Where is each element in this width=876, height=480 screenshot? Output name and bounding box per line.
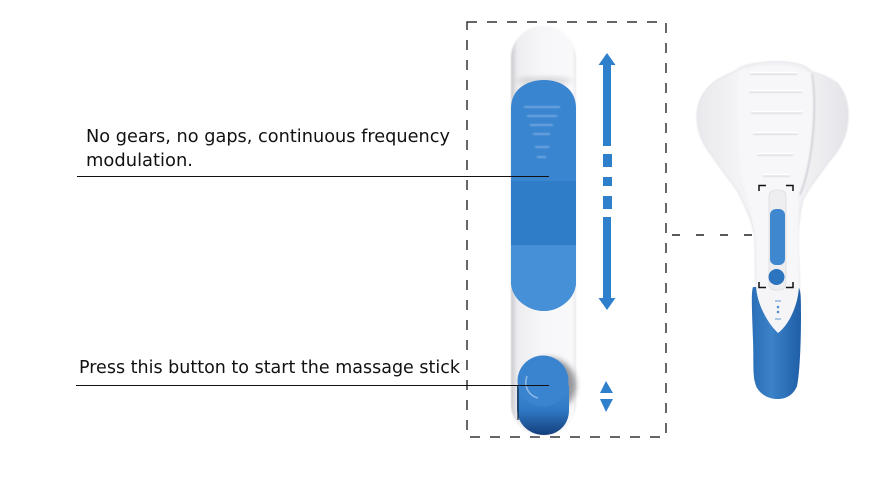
arrow: continuous up and down range xyxy=(598,53,616,310)
slider: frequency control xyxy=(511,77,576,311)
panel: dashed detail frame xyxy=(467,22,666,437)
callout text: No gears, no gaps, continuous frequency xyxy=(86,127,450,147)
slot xyxy=(511,26,576,436)
mini slider xyxy=(770,209,785,265)
bracket marks around control area xyxy=(759,186,793,288)
mini indicator dots xyxy=(775,300,781,320)
start button xyxy=(517,356,576,435)
callout: frequency modulation xyxy=(77,127,549,176)
head ridge shadows xyxy=(749,74,802,176)
massager head xyxy=(697,62,848,295)
enlarged control strip xyxy=(511,26,576,436)
connector: dashed leader xyxy=(672,234,755,236)
white label area xyxy=(756,284,799,333)
raised centre panel xyxy=(737,65,813,295)
mini button xyxy=(768,269,784,285)
blue grip xyxy=(752,287,801,399)
mini slot xyxy=(769,190,786,290)
icon: small up and down triangles xyxy=(600,381,613,412)
head ridges xyxy=(749,72,802,174)
product photo: massage stick xyxy=(697,62,848,399)
callout: start button: Press this button to start the massage stick xyxy=(79,358,461,378)
side crease xyxy=(800,74,814,195)
callout: frequency modulation: modulation. xyxy=(86,151,193,171)
